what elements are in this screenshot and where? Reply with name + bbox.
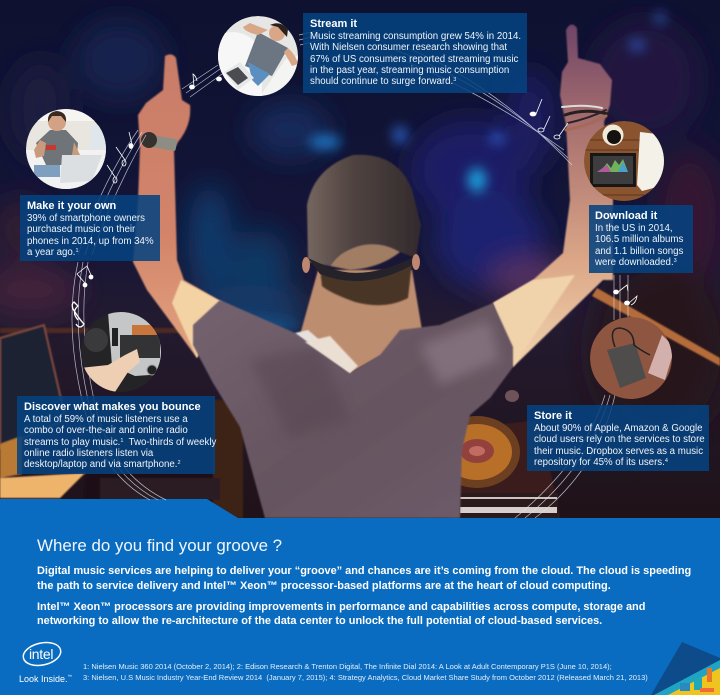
panel: stream it xyxy=(303,13,527,93)
cap xyxy=(307,155,421,266)
logo: intel look inside: Look Inside.™ xyxy=(19,674,72,684)
text: xeon paragraph: networking to allow the re-architecture of the data center to unlock the full potential of cloud-based services. xyxy=(37,615,602,627)
text: download it body: 106.5 million albums xyxy=(595,234,683,245)
text: footnotes: 1: Nielsen Music 360 2014 (October 2, 2014); 2: Edison Research & Trenton Digital, The Infinite Dial 2014: A Look at Adult Contemporary P1S (June 10, 2014); xyxy=(83,662,612,671)
heading: make it your own: Make it your own xyxy=(27,200,116,212)
icon: music notes xyxy=(72,74,637,327)
text: download it body xyxy=(595,223,683,268)
heading: where do you find your groove: Where do you find your groove ? xyxy=(37,536,282,555)
logo: intel look inside xyxy=(19,642,72,684)
text: footnotes xyxy=(83,662,648,682)
text: stream it body xyxy=(310,31,521,87)
text: stream it body: in the past year, streaming music consumption xyxy=(310,65,509,76)
shirt xyxy=(193,300,513,518)
text: store it body: repository for 45% of its users.4 xyxy=(534,457,668,468)
heading: discover: Discover what makes you bounce xyxy=(24,401,201,413)
panel: download it xyxy=(589,205,693,273)
text: discover body: desktop/laptop and via smartphone.2 xyxy=(24,459,181,470)
text: store it body: cloud users rely on the services to store xyxy=(534,434,705,445)
panel: make it your own xyxy=(20,195,160,261)
text: make it your own body: a year ago.1 xyxy=(27,247,79,258)
text: make it your own body: phones in 2014, up from 34% xyxy=(27,236,154,247)
logo: intel look inside: intel xyxy=(29,646,53,662)
text: discover body xyxy=(24,414,216,470)
panel: discover what makes you bounce xyxy=(17,396,215,474)
heading: stream it: Stream it xyxy=(310,18,357,30)
text: download it body: and 1.1 billion songs xyxy=(595,246,683,257)
text: stream it body: should continue to surge forward.3 xyxy=(310,76,456,87)
neck xyxy=(300,270,422,373)
text: stream it body: With Nielsen consumer research showing that xyxy=(310,42,507,53)
icon: music staff lines xyxy=(72,30,628,518)
icon: wrist bands xyxy=(562,106,608,130)
heading: store it: Store it xyxy=(534,410,572,422)
photo: external hard drive on wood xyxy=(590,317,672,399)
DJ figure xyxy=(133,24,613,518)
text: discover body: online radio listeners listen via xyxy=(24,448,153,459)
text: store it body xyxy=(534,423,705,468)
text: footnotes: 3: Nielsen, U.S Music Industry Year-End Review 2014 (January 7, 2015); 4: Strategy Analytics, Cloud Market Share Study from October 2012 (Released March 21, 2013) xyxy=(83,672,648,682)
text: stream it body: 67% of US consumers reported streaming music xyxy=(310,54,518,65)
crowd lights xyxy=(0,20,720,440)
photo: hand on car stereo xyxy=(80,312,165,392)
text: download it body: In the US in 2014, xyxy=(595,223,673,234)
text: store it body: their music. Dropbox serves as a music xyxy=(534,446,703,457)
text: discover body: combo of over-the-air and online radio xyxy=(24,425,188,436)
DJ booth and laptop xyxy=(0,288,720,518)
text: digital music paragraph: the path to service delivery and Intel™ Xeon™ processor-based platforms are at the heart of cloud computing. xyxy=(37,580,611,592)
arm: left raised xyxy=(133,54,222,358)
text: digital music paragraph xyxy=(37,565,691,592)
corner chip art xyxy=(651,642,720,695)
photo: tablet and coffee on wooden table xyxy=(583,121,665,201)
text: download it body: were downloaded.3 xyxy=(595,257,677,268)
panel: store it xyxy=(527,405,709,471)
icon: wristwatch xyxy=(141,132,177,151)
text: digital music paragraph: Digital music services are helping to deliver your “groove” and chances are it’s coming from the cloud. The cloud is speeding xyxy=(37,565,691,577)
text: xeon paragraph: Intel™ Xeon™ processors are providing improvements in performance and capabilities across compute, storage and xyxy=(37,600,645,612)
text: make it your own body: purchased music on their xyxy=(27,224,135,235)
text: discover body: streams to play music.1 Two-thirds of weekly xyxy=(24,437,216,448)
photo: man with credit card and laptop xyxy=(26,109,106,190)
text: store it body: About 90% of Apple, Amazon & Google xyxy=(534,423,703,434)
text: make it your own body: 39% of smartphone owners xyxy=(27,213,145,224)
text: stream it body: Music streaming consumption grew 54% in 2014. xyxy=(310,31,521,42)
arm: right raised xyxy=(493,24,613,367)
text: discover body: A total of 59% of music listeners use a xyxy=(24,414,188,425)
photo: man on couch with laptop xyxy=(218,16,300,96)
text: xeon paragraph xyxy=(37,600,645,627)
blue footer shape xyxy=(0,499,720,695)
text: make it your own body xyxy=(27,213,154,258)
heading: download it: Download it xyxy=(595,210,657,222)
